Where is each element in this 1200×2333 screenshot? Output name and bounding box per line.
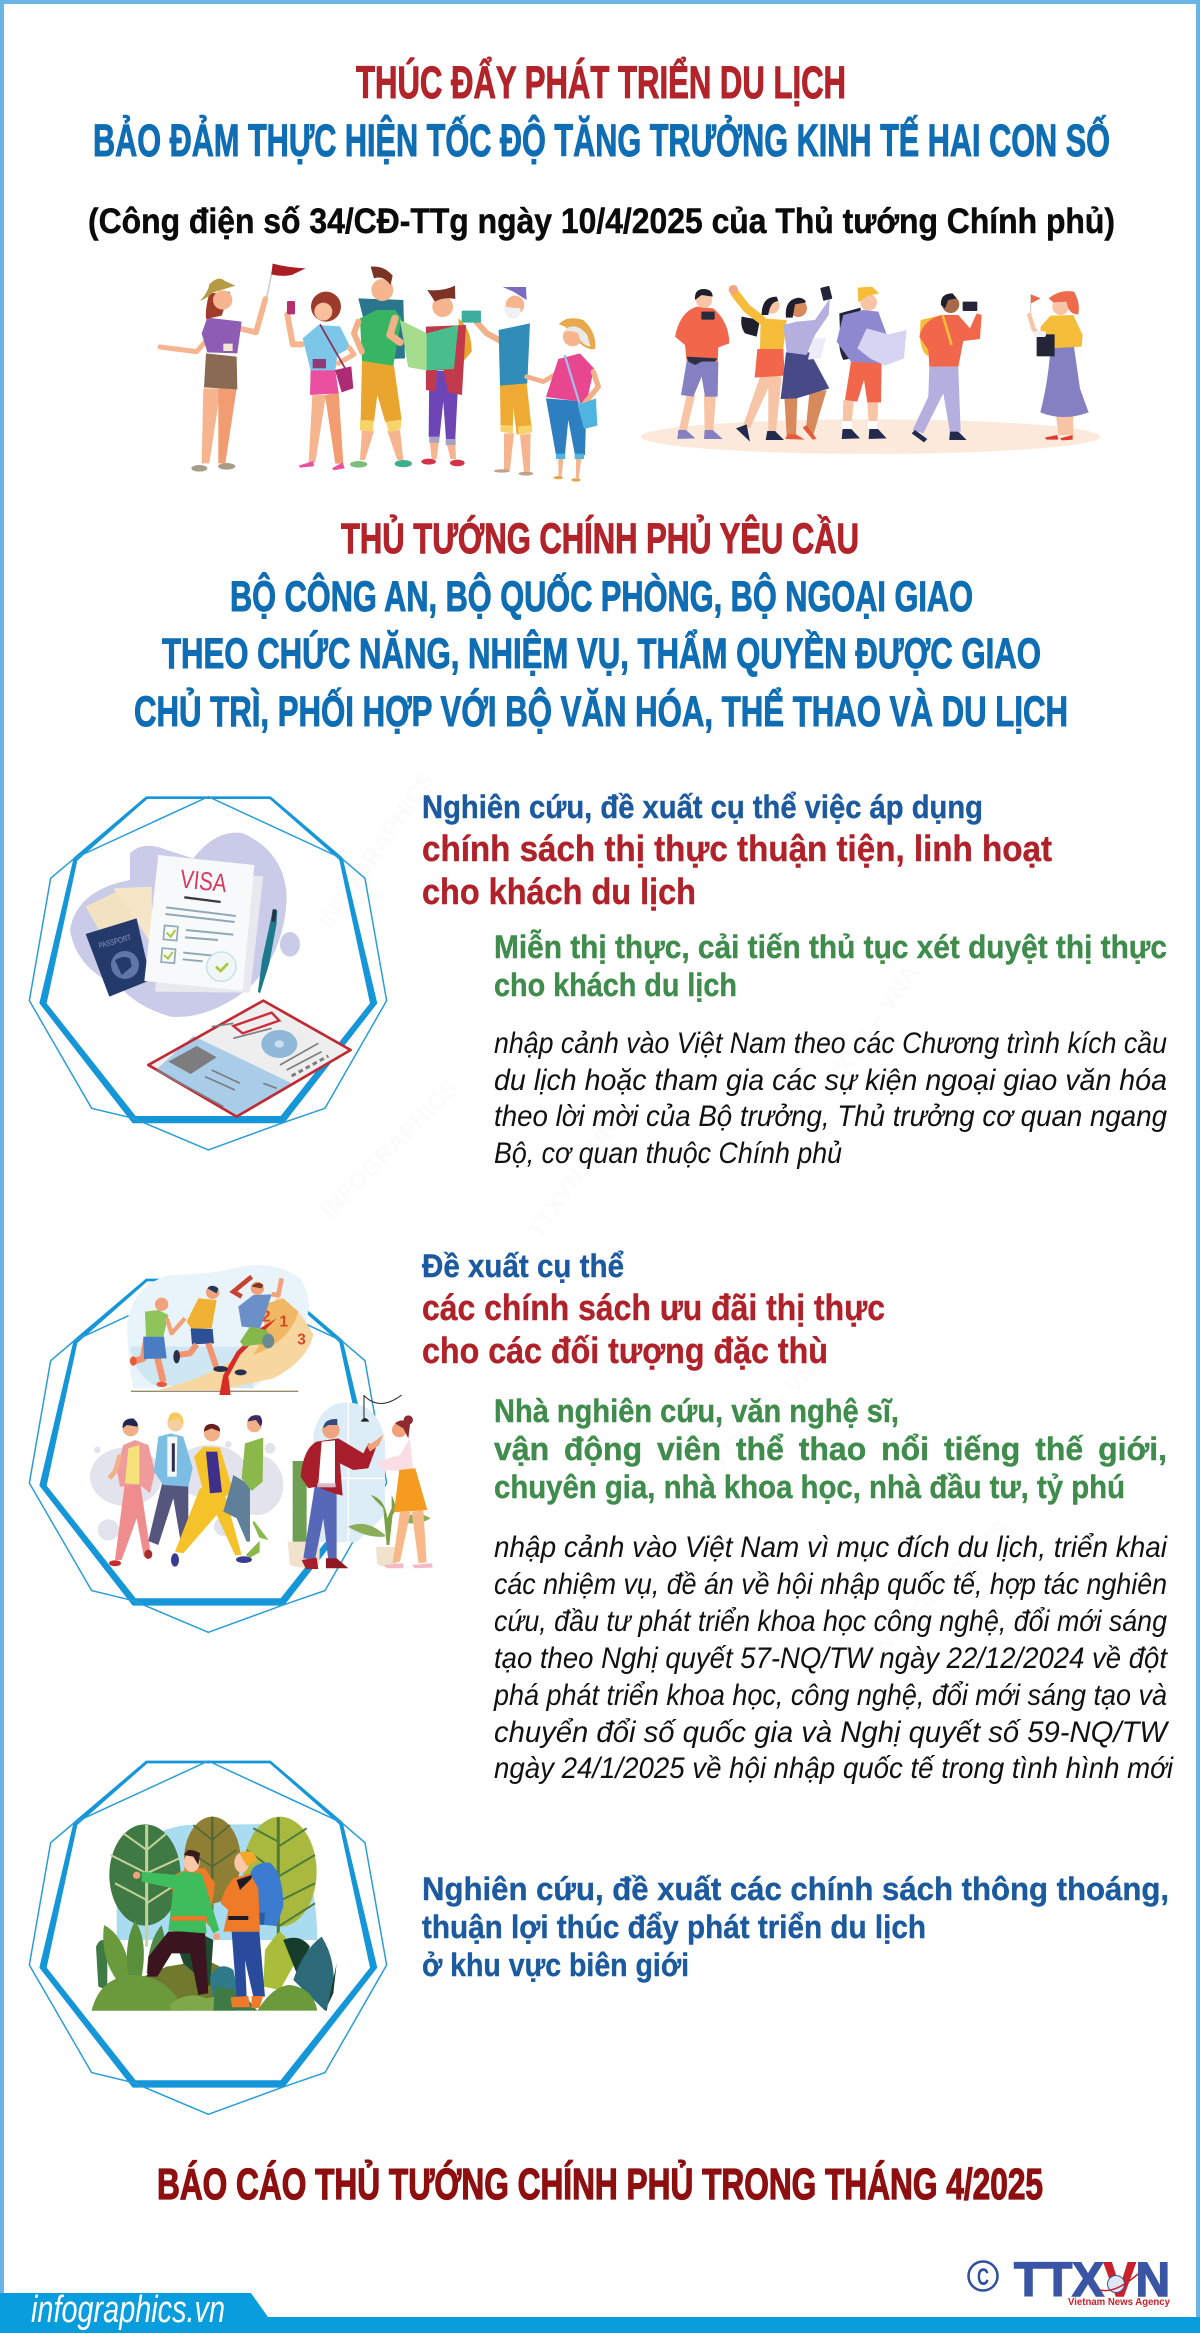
heading text bbox=[422, 1248, 885, 1371]
business couple bbox=[288, 1395, 433, 1569]
old man with phone bbox=[462, 287, 560, 476]
foliage bbox=[92, 1921, 337, 2011]
ground ellipse bbox=[641, 419, 1101, 454]
illustration: group of tourists with guide bbox=[160, 264, 598, 482]
agency wordmark: TTXVN bbox=[1014, 2254, 1170, 2307]
man with hoodie and camera bbox=[675, 289, 729, 439]
hiker in orange bbox=[221, 1851, 283, 2008]
green subheading: Nhà nghiên cứu, văn nghệ sĩ, bbox=[494, 1393, 899, 1429]
hiker in green bbox=[133, 1850, 220, 1995]
icon: octagon frame with athletes and professionals bbox=[29, 1265, 433, 1632]
agency name: Vietnam News Agency bbox=[1068, 2296, 1170, 2308]
man with backpack and map bbox=[837, 287, 907, 439]
footer bar bbox=[0, 2289, 1200, 2333]
heading line 1: THỦ TƯỚNG CHÍNH PHỦ YÊU CẦU bbox=[341, 514, 859, 563]
guide woman bbox=[160, 264, 306, 472]
section heading bbox=[134, 514, 1068, 736]
heading text bbox=[422, 789, 1052, 912]
man with map bbox=[400, 286, 472, 466]
italic description bbox=[493, 1531, 1174, 1785]
copyright mark bbox=[968, 2262, 998, 2291]
woman in yellow waving bbox=[729, 285, 787, 442]
heading text: cho khách du lịch bbox=[422, 871, 696, 912]
blue heading text: Nghiên cứu, đề xuất các chính sách thông thoáng, bbox=[422, 1871, 1169, 1907]
panel: special visa incentives bbox=[29, 1248, 1174, 1785]
icon: octagon frame with hikers bbox=[29, 1761, 387, 2114]
selfie girl bbox=[287, 292, 354, 470]
icon: octagon frame with visa documents: PASSPORT bbox=[98, 933, 132, 950]
athletes running bbox=[127, 1265, 313, 1395]
man in green shirt bbox=[350, 266, 412, 468]
copyright mark: C bbox=[977, 2264, 989, 2291]
green subheading: Miễn thị thực, cải tiến thủ tục xét duyệt thị thực bbox=[494, 929, 1167, 965]
heading text: các chính sách ưu đãi thị thực bbox=[422, 1287, 885, 1328]
panel: border tourism policy bbox=[29, 1761, 1169, 2114]
woman in navy skirt with phone bbox=[781, 286, 832, 440]
athletes running: 3 bbox=[297, 1331, 306, 1348]
blue heading text: thuận lợi thúc đẩy phát triển du lịch bbox=[422, 1909, 926, 1945]
panel: visa policy bbox=[29, 789, 1167, 1170]
italic description: du lịch hoặc tham gia các sự kiện ngoại giao văn hóa bbox=[494, 1064, 1167, 1097]
italic description: nhập cảnh vào Việt Nam vì mục đích du lịch, triển khai bbox=[494, 1531, 1168, 1564]
green subheading: cho khách du lịch bbox=[494, 967, 737, 1003]
subtitle: (Công điện số 34/CĐ-TTg ngày 10/4/2025 của Thủ tướng Chính phủ) bbox=[88, 202, 1115, 241]
heading text: Đề xuất cụ thể bbox=[422, 1248, 624, 1284]
blue heading text: ở khu vực biên giới bbox=[422, 1947, 689, 1983]
globe bbox=[1100, 2274, 1138, 2292]
old lady in pink bbox=[546, 318, 598, 482]
heading text: chính sách thị thực thuận tiện, linh hoạt bbox=[422, 828, 1052, 869]
title line 1: THÚC ĐẨY PHÁT TRIỂN DU LỊCH bbox=[356, 57, 846, 108]
heading text: Nghiên cứu, đề xuất cụ thể việc áp dụng bbox=[422, 789, 983, 825]
icon: octagon frame with visa documents bbox=[29, 796, 387, 1150]
logo: TTXVN bbox=[968, 2254, 1170, 2308]
athletes running: 1 bbox=[279, 1314, 288, 1331]
illustration: tourists taking photos with guide bbox=[641, 285, 1101, 454]
tour guide with flag bbox=[1029, 291, 1089, 440]
green subheading: chuyên gia, nhà khoa học, nhà đầu tư, tỷ phú bbox=[494, 1469, 1125, 1505]
title bbox=[93, 57, 1110, 166]
italic description: chuyển đổi số quốc gia và Nghị quyết số 59-NQ/TW bbox=[494, 1716, 1170, 1749]
blue heading text bbox=[422, 1871, 1169, 1983]
green subheading bbox=[494, 1393, 1167, 1505]
athletes running: 2 bbox=[262, 1309, 271, 1326]
heading text: cho các đối tượng đặc thù bbox=[422, 1330, 828, 1371]
fashion group bbox=[90, 1413, 283, 1567]
green subheading bbox=[494, 929, 1167, 1003]
footer site name: infographics.vn bbox=[31, 2289, 225, 2331]
icon: octagon frame with visa documents: VISA bbox=[179, 863, 229, 898]
italic description: Bộ, cơ quan thuộc Chính phủ bbox=[494, 1137, 842, 1170]
green subheading: vận động viên thể thao nổi tiếng thế giới, bbox=[494, 1431, 1167, 1467]
italic description bbox=[494, 1027, 1167, 1170]
man photographing with camera bbox=[912, 293, 982, 442]
